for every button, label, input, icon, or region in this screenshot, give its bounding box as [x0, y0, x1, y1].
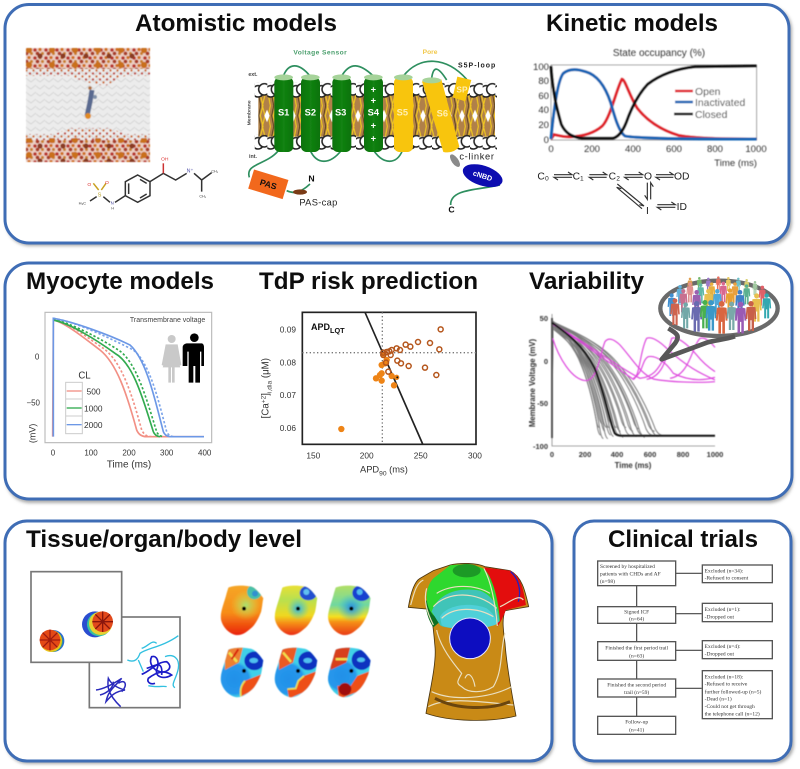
axis ticks and labels: Time (ms) — [107, 460, 151, 471]
Markov state diagram — [537, 171, 689, 217]
box: excluded 4: -Dropped out — [705, 651, 735, 657]
helices S1 to S4: + — [371, 120, 377, 130]
heading: Myocyte models: Myocyte models — [26, 268, 214, 295]
hERG ion channel topology — [247, 49, 505, 215]
legend: Open — [695, 87, 721, 98]
activation maps bottom row — [216, 646, 372, 699]
helices S1 to S4: S2 — [305, 108, 316, 118]
body surface potential torso — [408, 563, 529, 720]
box: excluded 1: -Dropped out — [705, 615, 735, 621]
x axis labels — [548, 144, 767, 155]
molecular dynamics membrane snapshot — [26, 48, 150, 162]
axis labels: -50 — [537, 399, 548, 408]
sotalol chemical structure: S — [98, 193, 102, 199]
panel: Tissue/organ/body level — [5, 521, 554, 764]
icon: man — [183, 333, 204, 383]
helices S1 to S4: + — [371, 133, 377, 143]
x axis labels: 800 — [707, 144, 723, 155]
legend — [674, 87, 745, 121]
panel: Clinical trials — [574, 521, 794, 764]
open points — [381, 327, 443, 377]
axis labels: 300 — [468, 450, 482, 460]
axis labels: 600 — [644, 450, 656, 459]
PAS domain — [248, 170, 288, 199]
axis labels — [528, 314, 723, 470]
sotalol chemical structure — [79, 157, 219, 210]
box: screened: patients with CHDs and AF — [600, 571, 661, 577]
box: excluded 18: the telephone call (n=12) — [705, 711, 760, 718]
axis ticks and labels — [26, 352, 212, 471]
axis labels: 200 — [360, 450, 374, 460]
Markov state diagram: C₀ — [537, 171, 549, 182]
spiral wave square — [31, 572, 122, 662]
heading: Clinical trials: Clinical trials — [608, 526, 758, 553]
box: first period: (n=63) — [629, 652, 644, 659]
axis labels: 0.07 — [280, 390, 296, 400]
axis ticks and labels: −50 — [26, 399, 41, 408]
channel domain labels — [247, 49, 495, 215]
axis labels: APD — [360, 465, 379, 475]
heading: Atomistic models: Atomistic models — [135, 10, 337, 37]
helices S1 to S4: S4 — [368, 108, 380, 118]
helices S1 to S4: S3 — [335, 108, 346, 118]
occupancy curves — [551, 66, 757, 139]
box: excluded 18: Excluded (n=18): — [705, 673, 744, 680]
helices S1 to S4 — [274, 74, 383, 152]
CL legend: 1000 — [84, 403, 103, 413]
box: excluded 34: Excluded (n=34): — [705, 567, 744, 574]
channel domain labels: Membrane — [247, 100, 253, 125]
box: first period: Finished the first period trail — [605, 645, 669, 652]
Markov state diagram: O — [644, 171, 652, 182]
panel: cellular models — [5, 263, 793, 503]
x axis labels: 200 — [584, 144, 600, 155]
axis labels: 0 — [544, 357, 548, 366]
state occupancy line chart: State occupancy (%) — [613, 48, 705, 59]
box: signed ICF: (n=64) — [629, 616, 644, 623]
membrane bilayer — [255, 83, 497, 150]
PAS domain: PAS — [259, 177, 278, 192]
box: excluded 34 — [702, 565, 772, 583]
magenta early afterdepolarisation traces — [553, 323, 715, 382]
axis labels: 0.08 — [280, 357, 296, 367]
heading: Tissue/organ/body level: Tissue/organ/body level — [26, 526, 302, 553]
axis labels: 0 — [550, 450, 554, 459]
y axis labels: 20 — [538, 120, 549, 131]
helices S5, S6 and pore loop: S5 — [397, 108, 408, 118]
box: excluded 18: -Could not get through — [705, 704, 755, 710]
axis labels: 0.09 — [280, 324, 296, 334]
helices S1 to S4: S1 — [278, 108, 289, 118]
x axis labels: 1000 — [745, 144, 767, 155]
axis labels: (μM) — [261, 358, 272, 381]
channel domain labels: PAS-cap — [299, 197, 337, 207]
connectors — [637, 573, 702, 716]
icon: woman — [162, 335, 181, 383]
box: second period — [598, 679, 676, 697]
axis ticks and labels: 0 — [35, 352, 40, 361]
action potential chart — [26, 312, 212, 471]
Markov state diagram: ID — [677, 202, 687, 213]
x axis labels: 600 — [666, 144, 682, 155]
speech bubble with crowd icon — [660, 276, 778, 359]
CNBD domain: cNBD — [472, 168, 493, 183]
state occupancy line chart: Time (ms) — [714, 158, 757, 169]
sotalol chemical structure: CH₃ — [211, 169, 219, 173]
activation maps top row — [218, 584, 372, 637]
box: first period — [598, 642, 676, 660]
state occupancy line chart — [533, 48, 767, 169]
PAS-cap ellipse — [293, 189, 307, 195]
panel: Atomistic models — [5, 4, 792, 246]
heading: TdP risk prediction: TdP risk prediction — [259, 268, 478, 295]
TdP scatter plot — [261, 312, 482, 478]
sotalol chemical structure: O — [105, 180, 109, 186]
box: excluded 1 — [702, 603, 772, 622]
sotalol chemical structure: CH₃ — [199, 194, 207, 198]
sotalol chemical structure: N — [111, 201, 114, 206]
axis ticks and labels: 0 — [51, 448, 56, 457]
box: excluded 18 — [702, 671, 772, 719]
helices S5, S6 and pore loop: SP — [456, 85, 468, 95]
axis labels: 250 — [414, 450, 428, 460]
sotalol chemical structure: N⁺ — [187, 168, 194, 174]
axis labels: 150 — [306, 450, 321, 460]
sotalol chemical structure: H₃C — [79, 200, 86, 205]
axis ticks and labels: 100 — [84, 448, 98, 457]
channel domain labels: S5P-loop — [458, 63, 495, 70]
y axis labels: 0 — [544, 135, 549, 146]
TdP scatter plot: APD — [311, 322, 330, 332]
channel domain labels: int. — [249, 154, 258, 160]
CL legend: CL — [78, 370, 91, 381]
box: excluded 18: -Refused to receive — [705, 681, 748, 688]
helices S5, S6 and pore loop — [394, 74, 471, 152]
axis labels: 200 — [579, 450, 591, 459]
axis ticks and labels: (mV) — [28, 424, 38, 443]
Markov state diagram: C₁ — [573, 171, 584, 182]
channel domain labels: N — [308, 174, 315, 184]
helices S5, S6 and pore loop: S6 — [437, 108, 448, 118]
axis labels: Time (ms) — [615, 461, 652, 470]
axis ticks and labels: 300 — [160, 448, 174, 457]
legend: Closed — [695, 110, 728, 121]
axis labels: +2 — [261, 395, 268, 403]
axis labels: [Ca — [261, 403, 272, 418]
sotalol chemical structure: H — [111, 206, 114, 210]
x axis labels: 0 — [548, 144, 554, 155]
box: screened — [598, 561, 676, 586]
axis labels: Membrane Voltage (mV) — [528, 338, 537, 427]
population of action potentials chart — [528, 314, 723, 470]
Markov state diagram: I — [646, 206, 649, 217]
box: excluded 18: -Dead (n=1) — [705, 696, 732, 703]
filled points — [338, 352, 399, 432]
CONSORT flow chart — [598, 561, 772, 734]
black reference trace — [552, 323, 715, 436]
axis labels: i,dia — [266, 381, 273, 393]
box: second period: Finished the second period — [607, 683, 666, 689]
box: screened: Screened by hospitalized — [600, 564, 655, 570]
box: follow-up — [598, 716, 676, 734]
axis labels: -100 — [533, 442, 548, 451]
CL legend: 500 — [87, 387, 101, 397]
legend: Inactivated — [695, 98, 745, 109]
axis labels — [261, 324, 482, 478]
axis labels: 90 — [379, 471, 387, 478]
box: excluded 4 — [702, 641, 772, 659]
box: signed ICF — [598, 607, 676, 623]
helices S1 to S4: + — [371, 96, 377, 106]
y axis labels: 100 — [533, 62, 549, 73]
CNBD domain — [460, 160, 505, 192]
box: excluded 34: -Refused to consent — [705, 575, 749, 582]
CL legend: 2000 — [84, 420, 103, 430]
Markov state diagram: OD — [674, 171, 689, 182]
connecting loops — [249, 61, 500, 205]
y axis labels: 60 — [538, 91, 549, 102]
box: signed ICF: Signed ICF — [624, 609, 649, 615]
Markov state diagram: C₂ — [609, 171, 620, 182]
axis labels: 800 — [677, 450, 689, 459]
CL legend — [66, 370, 103, 434]
axis labels: 400 — [611, 450, 623, 459]
TdP scatter plot: LQT — [330, 326, 345, 335]
y axis labels: 80 — [538, 76, 549, 87]
y axis labels — [533, 62, 549, 146]
axis labels: 50 — [540, 314, 548, 323]
voltage curves — [53, 318, 204, 437]
axis labels: (ms) — [387, 465, 408, 475]
grey action potentials — [552, 321, 662, 439]
action potential chart: Transmembrane voltage — [130, 317, 205, 324]
box: excluded 18: further followed-up (n=5) — [705, 688, 762, 695]
axis ticks and labels: 400 — [198, 448, 212, 457]
box: follow-up: Follow-up — [625, 720, 648, 726]
box: excluded 4: Excluded (n=4): — [705, 643, 741, 650]
filament tracking square — [89, 617, 180, 708]
axis ticks and labels: 200 — [122, 448, 136, 457]
axis labels: 0.06 — [280, 423, 296, 433]
axis labels: ] — [261, 393, 272, 396]
box: excluded 1: Excluded (n=1): — [705, 606, 741, 613]
y axis labels: 40 — [538, 105, 549, 116]
channel domain labels: Voltage Sensor — [293, 50, 347, 57]
sotalol chemical structure: O — [87, 182, 91, 188]
channel domain labels: c-linker — [459, 151, 494, 161]
box: follow-up: (n=41) — [629, 726, 644, 733]
crowd — [668, 276, 771, 334]
x axis labels: 400 — [625, 144, 641, 155]
heading: Variability: Variability — [529, 268, 645, 295]
sotalol chemical structure: OH — [161, 157, 169, 163]
box: screened: (n=98) — [600, 578, 615, 585]
channel domain labels: Pore — [423, 49, 438, 56]
c-linker ellipse — [448, 153, 462, 169]
heading: Kinetic models: Kinetic models — [546, 10, 718, 37]
channel domain labels: ext. — [248, 72, 258, 78]
box: second period: trail (n=59) — [624, 689, 649, 696]
channel domain labels: C — [448, 205, 455, 215]
axis labels: 1000 — [707, 450, 723, 459]
helices S1 to S4: + — [371, 84, 377, 94]
